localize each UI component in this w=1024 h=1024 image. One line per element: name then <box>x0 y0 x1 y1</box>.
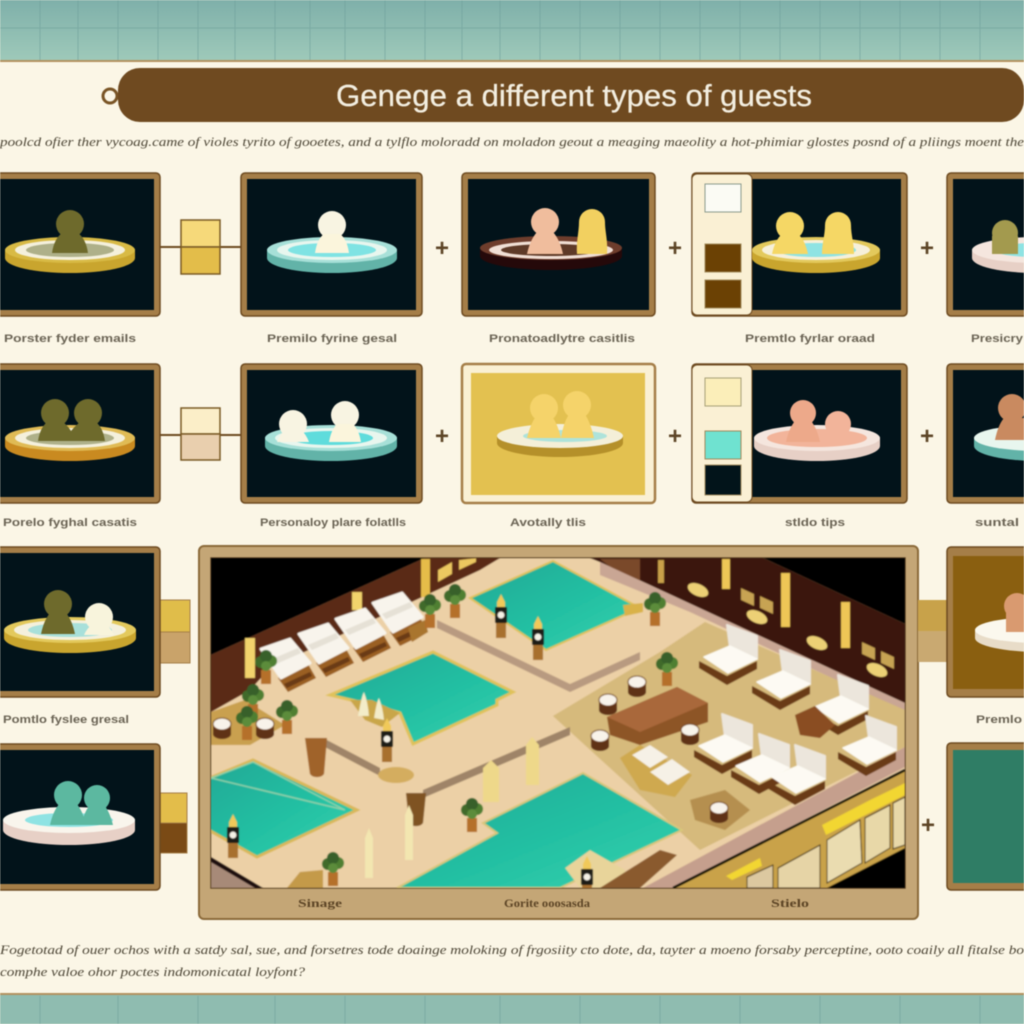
plants <box>444 584 466 618</box>
card: row 1 guest 2 <box>241 173 422 316</box>
sofa <box>620 745 692 797</box>
loungers on gold floor <box>699 625 757 685</box>
pool A <box>470 561 640 650</box>
captions row 2: suntal <box>975 517 1019 529</box>
wooden table <box>606 702 709 746</box>
card: row 1 guest 1 <box>0 173 160 316</box>
plus: + <box>920 423 934 450</box>
right black void <box>763 558 905 624</box>
connector: row 1 swatch <box>160 220 241 274</box>
captions row 2 <box>3 517 1019 529</box>
gold lounge floor <box>553 622 905 850</box>
gold bench and mound <box>378 767 414 783</box>
card: row 4 right green swatch <box>947 743 1024 890</box>
intro text: poolcd ofier ther vycoag.came of violes tyrito of gooetes, and a tylflo moloradd on moladon geout a meaging maeolity a hot-phimiar glostes posnd of a pliings moent the <box>0 134 1024 149</box>
card: row 2 guest 4 with swatch column <box>692 364 907 503</box>
urn planters <box>305 738 327 777</box>
card: row 2 guest 5 <box>947 364 1024 503</box>
footer text: Fogetotad of ouer ochos with a satdy sal, sue, and forsetres tode doainge moloking of frgosiity cto dote, da, tayter a moeno forsaby perceptine, ooto coaily all fitalse bo <box>0 942 1024 957</box>
captions row 1: Pronatoadlytre casitlis <box>489 333 635 345</box>
title banner <box>103 68 1024 122</box>
background: teal grid bottom band <box>0 994 1024 1024</box>
card: row 2 guest 2 <box>241 364 422 503</box>
title banner: Genege a different types of guests <box>336 78 812 113</box>
captions row 1: Porster fyder emails <box>4 333 136 345</box>
left wall <box>211 558 500 712</box>
left black void <box>211 558 425 655</box>
footer text: comphe valoe ohor poctes indomonicatal loyfont? <box>0 964 306 979</box>
caption row 3 right: Premlo <box>976 714 1022 726</box>
background: teal grid top band <box>0 0 1024 62</box>
connector: row 2 swatch <box>160 408 241 460</box>
resort floor plan frame <box>199 546 918 919</box>
pool D lamp island and brown deck <box>565 850 625 888</box>
captions row 1: Premilo fyrine gesal <box>267 333 397 345</box>
fountains <box>358 692 384 720</box>
plus: + <box>921 812 935 839</box>
captions row 2: Avotally tlis <box>510 517 586 529</box>
plus: + <box>435 235 449 262</box>
card: row 1 guest 4 with swatch column <box>692 173 907 316</box>
isometric resort scene <box>205 558 905 900</box>
glowing windows <box>673 770 905 888</box>
right wall <box>590 558 905 703</box>
captions row 2: Personaloy plare folatlls <box>260 517 406 529</box>
captions row 2: Porelo fyghal casatis <box>3 517 137 529</box>
connector: row 3 left <box>156 600 190 663</box>
card: row 4 left guest <box>0 744 160 890</box>
resort floor plan frame: Gorite ooosasda <box>504 896 590 910</box>
captions row 2: stldo tips <box>785 517 845 529</box>
plus: + <box>435 423 449 450</box>
card: row 3 left guest <box>0 547 160 697</box>
lower-left corner <box>210 861 256 888</box>
loungers along left wall <box>261 639 316 692</box>
lamps <box>495 594 507 638</box>
deck shadow bands <box>437 620 640 692</box>
captions row 1 <box>4 333 1024 345</box>
lower deck edge <box>643 747 905 888</box>
card: row 1 guest 5 <box>947 173 1024 316</box>
card: row 1 guest 3 <box>462 173 655 316</box>
pool C <box>205 760 357 857</box>
resort floor plan frame: Sinage <box>298 896 343 910</box>
plus: + <box>668 423 682 450</box>
card: row 3 right guest <box>947 547 1024 697</box>
connector: row 4 left <box>156 793 187 853</box>
connector: row 3 right <box>918 600 952 662</box>
pool D <box>397 773 682 888</box>
card: row 2 yellow guest <box>462 364 655 503</box>
footer text <box>0 942 1024 979</box>
caption row 3 left: Pomtlo fyslee gresal <box>3 714 129 726</box>
pool B <box>330 652 513 744</box>
wall skirt <box>600 562 905 712</box>
plus: + <box>920 235 934 262</box>
plus: + <box>668 235 682 262</box>
card: row 2 guest 1 <box>0 364 160 503</box>
coffee table <box>795 706 835 738</box>
round tables <box>628 676 646 697</box>
captions row 1: Presicry <box>971 333 1024 345</box>
resort floor plan frame: Stielo <box>771 896 809 910</box>
captions row 1: Premtlo fyrlar oraad <box>745 333 875 345</box>
gold tile under left tables <box>211 700 285 745</box>
